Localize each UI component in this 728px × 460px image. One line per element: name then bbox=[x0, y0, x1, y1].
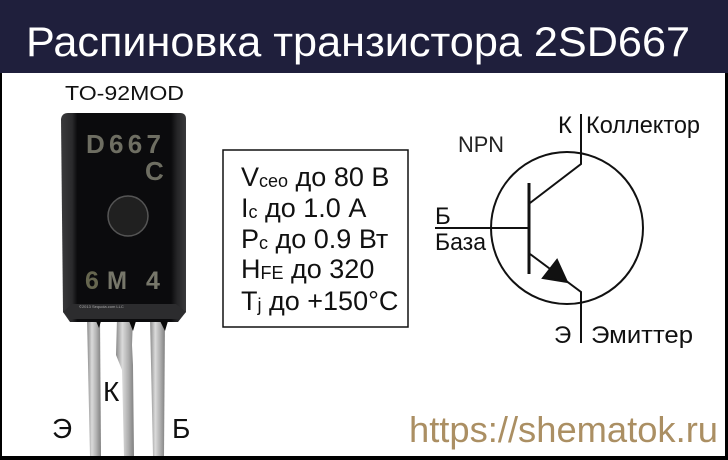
parameter: Tj: j bbox=[256, 295, 262, 315]
label: collector: К bbox=[558, 112, 572, 139]
parameter: Vceo: ceo bbox=[259, 171, 288, 191]
parameter: Pc: P bbox=[241, 224, 259, 254]
label: base name: База bbox=[435, 229, 487, 256]
parameter: HFE: FE bbox=[260, 263, 284, 283]
label: collector name: Коллектор bbox=[586, 112, 700, 139]
parameter: HFE: H bbox=[241, 254, 260, 284]
parameter: Tj: T bbox=[241, 286, 258, 316]
parameter: Vceo: до 80 В bbox=[288, 162, 389, 192]
label: emitter letter: Э bbox=[554, 322, 571, 349]
label: base letter: Б bbox=[435, 203, 451, 230]
transistor photo: ©2013 Sequoia.com LLC bbox=[79, 304, 124, 309]
emitter lead bbox=[530, 254, 581, 343]
NPN transistor schematic bbox=[435, 114, 643, 343]
pin label: base: Б bbox=[172, 413, 190, 444]
transistor photo: C bbox=[145, 156, 164, 186]
schematic circle bbox=[491, 152, 643, 304]
parameters box bbox=[223, 150, 408, 327]
transistor photo: M bbox=[107, 267, 127, 295]
base lead bbox=[435, 227, 529, 229]
body markings: D667 bbox=[86, 129, 161, 159]
website url: https://shematok.ru bbox=[409, 409, 718, 450]
package label: TO-92MOD bbox=[65, 83, 184, 105]
base bar bbox=[528, 183, 530, 274]
pin label: emitter: Э bbox=[52, 413, 72, 444]
parameter: Tj: до +150°C bbox=[262, 286, 398, 316]
transistor photo bbox=[61, 113, 186, 456]
transistor photo: 4 bbox=[146, 267, 160, 295]
pin labels on photo bbox=[52, 376, 190, 444]
package body bbox=[61, 113, 186, 322]
parameter: Pc: c bbox=[259, 233, 268, 253]
title: Распиновка транзистора 2SD667 bbox=[26, 18, 690, 65]
schematic labels bbox=[435, 112, 700, 349]
parameter: Vceo: V bbox=[241, 162, 259, 192]
label: emitter name: Эмиттер bbox=[591, 322, 693, 349]
parameter: HFE: до 320 bbox=[284, 254, 374, 284]
lead: emitter bbox=[87, 318, 101, 456]
collector lead bbox=[530, 114, 581, 203]
parameter: Ic: I bbox=[241, 193, 249, 223]
label: NPN: NPN bbox=[458, 132, 504, 157]
lead: collector bbox=[116, 318, 134, 456]
lead: base bbox=[150, 318, 165, 456]
parameter: Ic: c bbox=[249, 202, 258, 222]
parameter: Pc: до 0.9 Вт bbox=[268, 224, 388, 254]
transistor photo: 6 bbox=[85, 267, 99, 295]
emitter arrow bbox=[543, 260, 567, 282]
pin label: collector: К bbox=[103, 376, 120, 407]
parameter: Ic: до 1.0 А bbox=[258, 193, 366, 223]
header band bbox=[0, 0, 728, 73]
